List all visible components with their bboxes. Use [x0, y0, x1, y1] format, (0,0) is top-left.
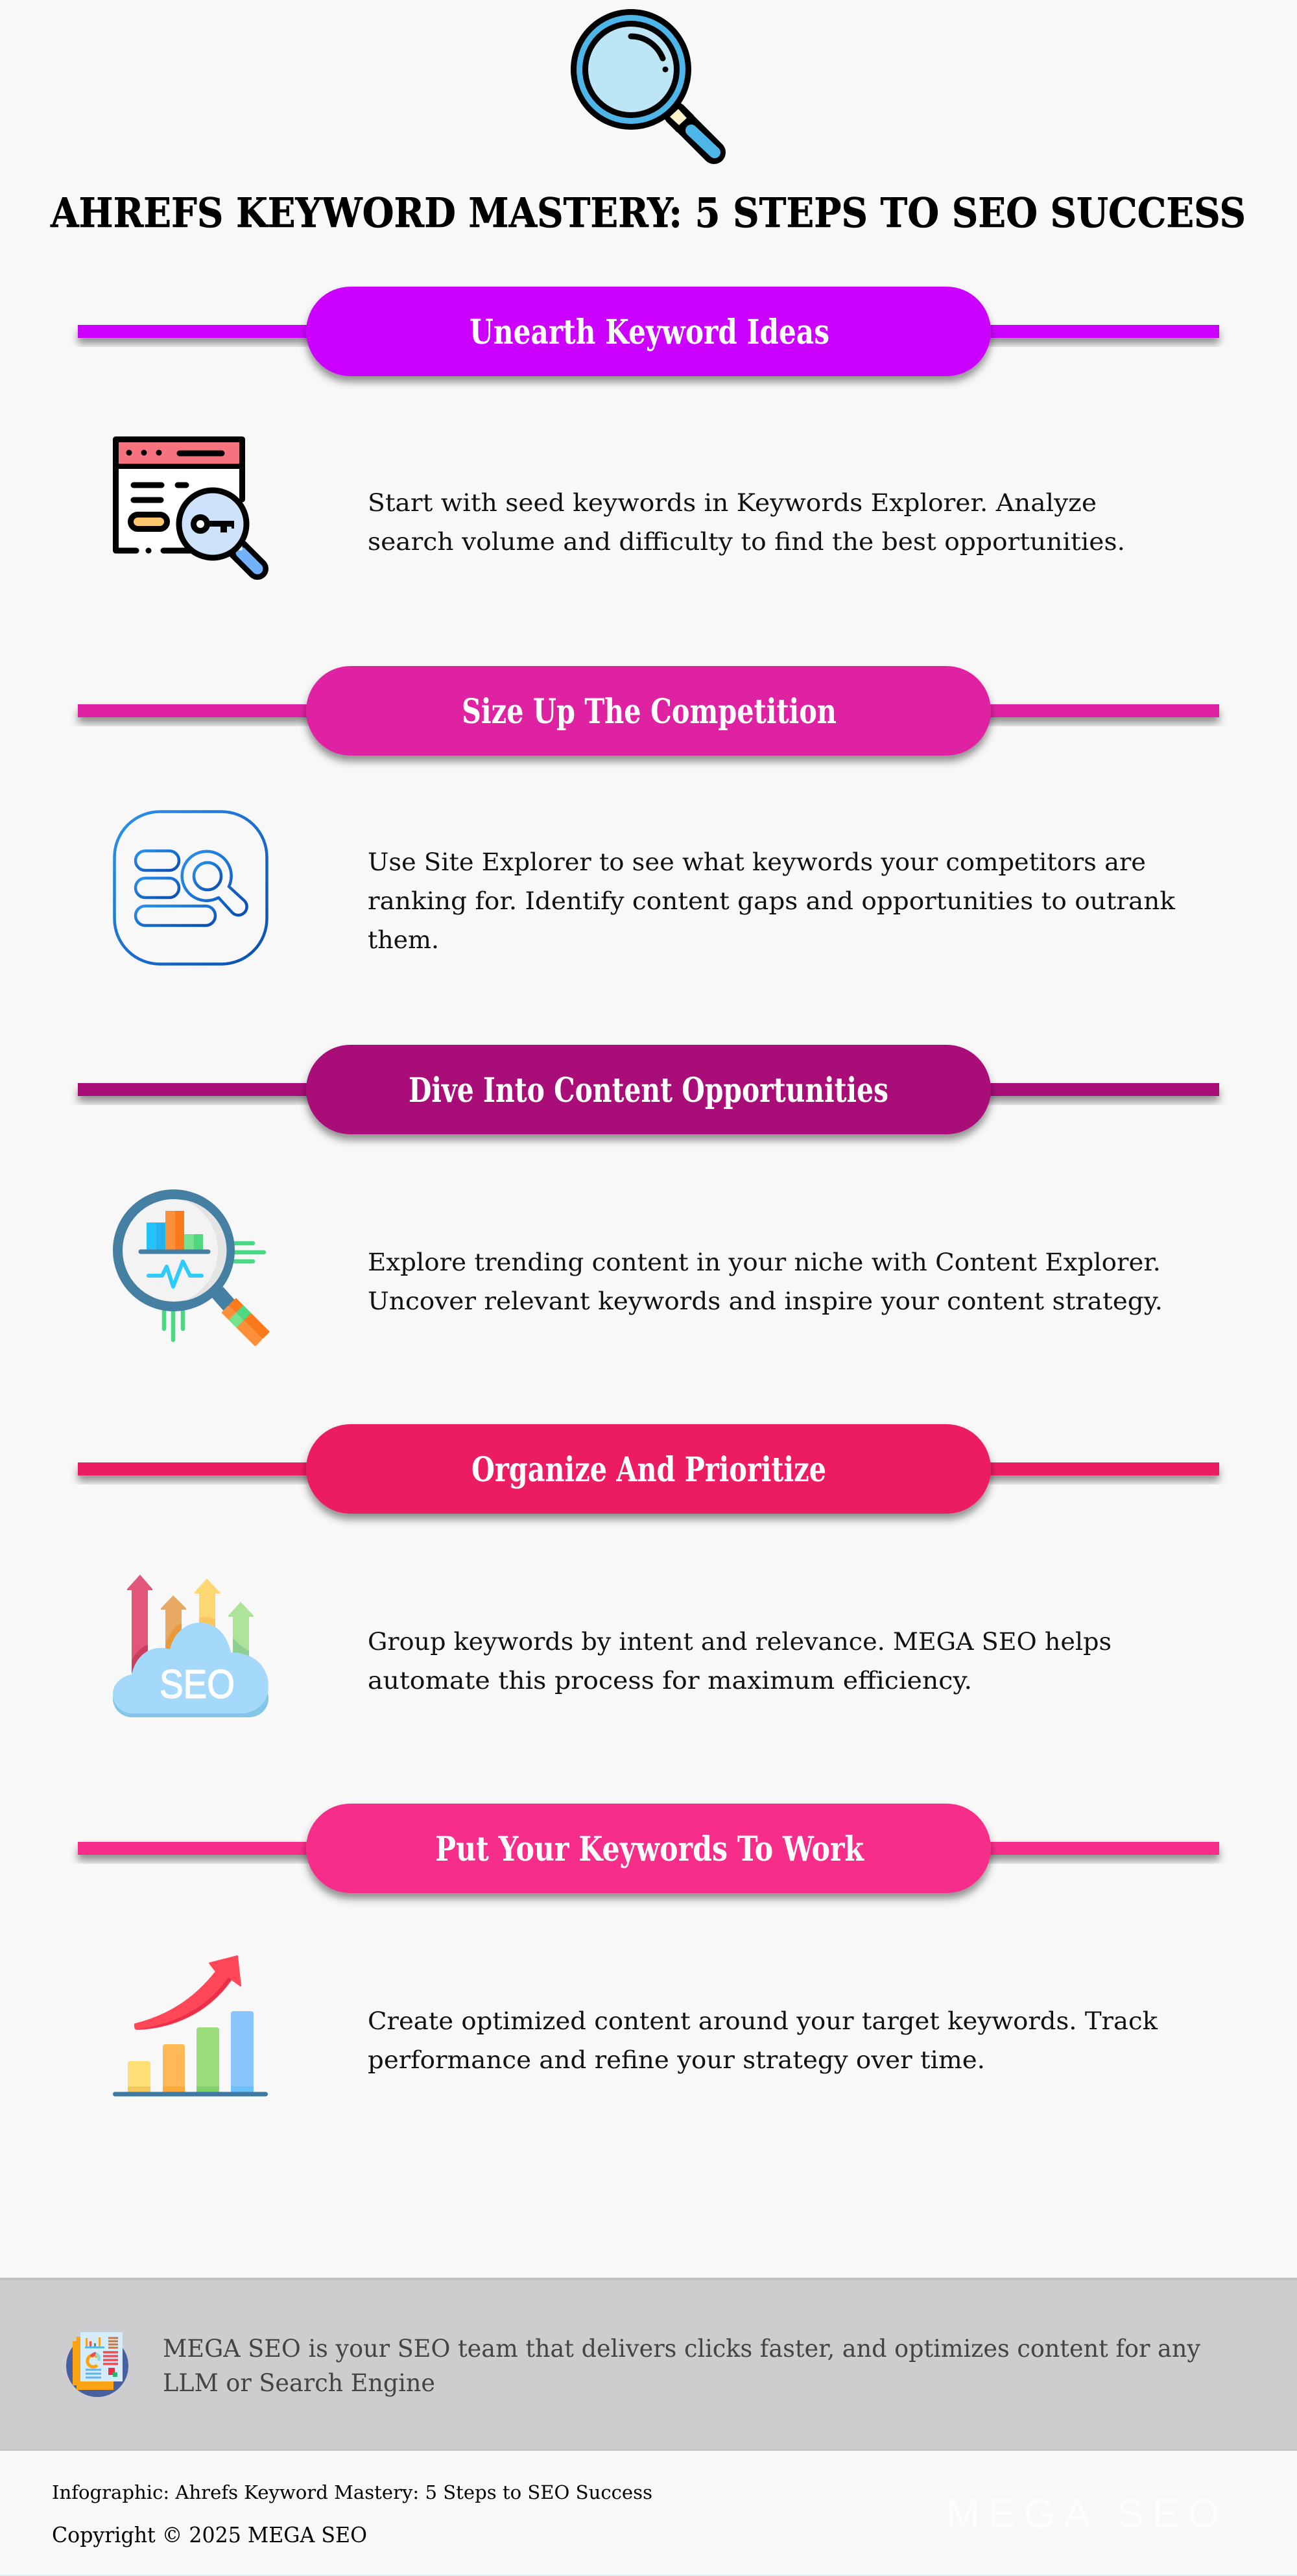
text: step 3 description	[368, 1248, 1163, 1315]
text: promo message: MEGA SEO is your SEO team that delivers clicks faster, and optimizes content for any	[163, 2335, 1200, 2363]
text: step 1 description: Start with seed keywords in Keywords Explorer. Analyze	[368, 489, 1097, 517]
icon: analytics magnifier	[118, 1195, 270, 1346]
icon: SEO cloud with arrows	[113, 1575, 268, 1717]
footer: copyright: Copyright © 2025 MEGA SEO	[52, 2522, 367, 2547]
icon: growth bar chart	[115, 1956, 266, 2094]
heading: step 2: Size Up The Competition	[462, 692, 837, 732]
panel: step 4 heading bar	[78, 1424, 1219, 1514]
icon: report document	[66, 2332, 128, 2397]
panel: promo band	[0, 2278, 1297, 2451]
text: step 5 description	[368, 2007, 1158, 2074]
text: promo message	[163, 2335, 1200, 2397]
text: step 4 description	[368, 1628, 1112, 1695]
heading: step 5: Put Your Keywords To Work	[435, 1830, 864, 1869]
text: step 2 description: Use Site Explorer to see what keywords your competitors are	[368, 848, 1146, 876]
text: step 2 description: ranking for. Identify content gaps and opportunities to outrank	[368, 887, 1176, 915]
heading: step 3: Dive Into Content Opportunities	[409, 1071, 888, 1110]
text: step 4 description: automate this process for maximum efficiency.	[368, 1667, 972, 1695]
footer: bottom edge line	[0, 2575, 1297, 2576]
icon: keyword browser search	[115, 440, 257, 569]
icon: SEO cloud with arrows: SEO	[160, 1662, 235, 1707]
heading: step 1: Unearth Keyword Ideas	[470, 313, 829, 352]
text: step 1 description	[368, 489, 1125, 556]
text: step 5 description: performance and refine your strategy over time.	[368, 2046, 985, 2074]
text: step 2 description: them.	[368, 926, 439, 954]
panel: step 1 heading bar	[78, 287, 1219, 376]
icon: outlined search list	[114, 812, 267, 964]
icon: magnifying glass	[571, 9, 715, 152]
text: step 3 description: Explore trending content in your niche with Content Explorer.	[368, 1248, 1161, 1276]
text: step 1 description: search volume and difficulty to find the best opportunities.	[368, 528, 1125, 556]
panel: step 5 heading bar	[78, 1804, 1219, 1893]
footer: infographic credit: Infographic: Ahrefs Keyword Mastery: 5 Steps to SEO Success	[52, 2481, 652, 2503]
text: step 5 description: Create optimized content around your target keywords. Track	[368, 2007, 1158, 2035]
footer: logo wordmark: MEGA SEO	[946, 2492, 1219, 2536]
text: step 2 description	[368, 848, 1176, 954]
panel: step 3 heading bar	[78, 1045, 1219, 1134]
text: promo message: LLM or Search Engine	[163, 2369, 435, 2397]
text: step 3 description: Uncover relevant keywords and inspire your content strategy.	[368, 1287, 1163, 1315]
text: step 4 description: Group keywords by intent and relevance. MEGA SEO helps	[368, 1628, 1112, 1656]
panel: step 2 heading bar	[78, 666, 1219, 756]
heading: step 4: Organize And Prioritize	[471, 1450, 826, 1490]
